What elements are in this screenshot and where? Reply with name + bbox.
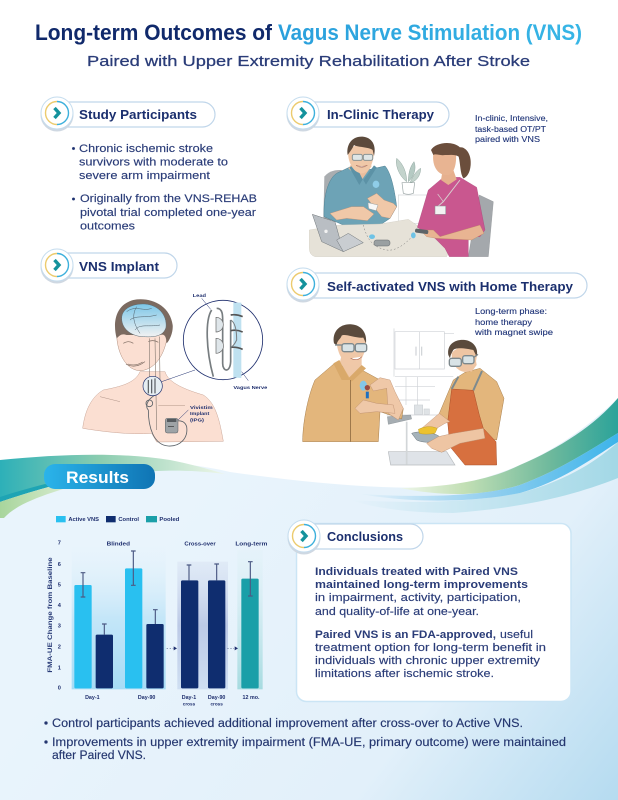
text block: bottom findings: Improvements in upper extremity impairment (FMA-UE, primary outcome) were maintained: [52, 737, 566, 749]
text block: conclusions: [315, 566, 546, 680]
text block: conclusions: treatment option for long-term benefit in: [315, 642, 546, 654]
badge: results: [44, 464, 155, 489]
caption: home therapy: with magnet swipe: [474, 327, 553, 337]
card: [296, 524, 571, 702]
y axis values: 5: [58, 583, 61, 589]
panel: self-activated VNS: [286, 268, 587, 465]
text block: bottom findings: Control participants achieved additional improvement after cross-over to Active VNS.: [52, 718, 523, 730]
heading: conclusions: [288, 520, 423, 554]
legend: Active VNS: [68, 517, 99, 523]
section titles: Long-term: [235, 541, 268, 547]
heading: study participants: Study Participants: [79, 107, 197, 122]
x labels: [85, 695, 260, 707]
y axis values: 0: [58, 686, 61, 692]
lead wire: [147, 395, 187, 446]
panel: in-clinic therapy: [286, 97, 548, 257]
patient washing dishes: [412, 340, 504, 465]
caption: in-clinic: In-clinic, Intensive,: [475, 113, 548, 123]
x labels: cross: [183, 702, 196, 707]
panel: conclusions: [288, 520, 571, 702]
y axis values: 2: [58, 645, 61, 651]
y axis values: 4: [58, 603, 62, 609]
y axis label: FMA-UE Change from Baseline: [47, 557, 54, 673]
subtitle: Paired with Upper Extremity Rehabilitation After Stroke: [87, 53, 530, 70]
text block: participants bullets: pivotal trial completed one-year: [80, 207, 256, 219]
label leaders: [177, 298, 248, 421]
patient: [324, 137, 397, 225]
plant and shelf: [396, 158, 427, 223]
panel: study participants: [40, 97, 257, 232]
error bars: [81, 551, 253, 635]
y axis values: [58, 540, 62, 692]
clinician: [415, 143, 485, 257]
face details: [123, 341, 158, 366]
labels: Vivistim: [190, 405, 213, 410]
title: [35, 20, 582, 45]
sink: [387, 415, 455, 465]
heading: conclusions: Conclusions: [327, 529, 403, 544]
legend: Control: [118, 517, 139, 523]
text block: participants bullets: Chronic ischemic stroke: [79, 143, 213, 155]
kitchen background: [387, 328, 454, 415]
heading: in-clinic therapy: In-Clinic Therapy: [327, 107, 435, 122]
labels: Lead: [193, 293, 206, 298]
x labels: Day-1: [182, 695, 196, 701]
caption: home therapy: home therapy: [475, 317, 533, 327]
bar chart: FMA-UE change from baseline: [47, 516, 268, 707]
arrows: [167, 646, 238, 650]
section titles: [107, 541, 268, 547]
device on table: [363, 225, 416, 250]
x labels: Day-90: [208, 695, 225, 701]
head: [117, 320, 170, 371]
labels: Implant: [190, 411, 210, 416]
callout connector: [162, 370, 195, 382]
caption: in-clinic: [475, 113, 548, 144]
illustration: home therapy: [303, 324, 504, 465]
panel: VNS implant: [40, 249, 268, 446]
y axis values: 3: [58, 624, 61, 630]
heading: VNS implant: [40, 249, 177, 284]
small callout circle: [143, 376, 162, 396]
chart sections: [72, 547, 166, 689]
labels: (IPG): [190, 418, 205, 423]
background wave: [0, 398, 618, 800]
illustration: clinician and patient at table: [309, 137, 493, 257]
text block: conclusions: limitations after ischemic stroke.: [315, 668, 494, 680]
x labels: Day-1: [85, 695, 100, 701]
magnified circle: [183, 300, 263, 380]
legend: [56, 516, 180, 523]
text block: conclusions: individuals with chronic upper extremity: [315, 655, 540, 667]
caption: home therapy: Long-term phase:: [475, 306, 547, 316]
text block: conclusions: Paired VNS is an FDA-approved,: [315, 629, 496, 641]
caption: in-clinic: paired with VNS: [475, 134, 540, 144]
illustration: implant in patient: [83, 293, 268, 446]
text block: bottom findings: [44, 718, 566, 762]
heading: VNS implant: VNS Implant: [79, 259, 160, 274]
heading: self-activated: Self-activated VNS with Home Therapy: [327, 279, 574, 294]
section titles: Cross-over: [184, 541, 216, 547]
laptop: [312, 214, 363, 252]
title: Vagus Nerve Stimulation (VNS): [278, 20, 582, 45]
y axis values: 6: [58, 562, 61, 568]
text block: conclusions: Individuals treated with Paired VNS: [315, 566, 518, 578]
y axis values: 1: [58, 665, 61, 671]
caption: in-clinic: task-based OT/PT: [475, 124, 546, 134]
x labels: Day-90: [138, 695, 155, 701]
legend: Pooled: [159, 517, 180, 523]
text block: participants bullets: survivors with moderate to: [79, 156, 228, 168]
text block: participants bullets: Originally from the VNS-REHAB: [80, 193, 257, 205]
text block: bottom findings: after Paired VNS.: [52, 750, 146, 762]
text block: conclusions: maintained long-term improvements: [315, 579, 528, 591]
implanted generator: [165, 418, 178, 433]
text block: conclusions: useful: [500, 629, 533, 641]
patient with magnet: [303, 324, 403, 442]
title: Long-term Outcomes of: [35, 20, 273, 45]
brain: [122, 304, 166, 337]
patient chair: [323, 170, 342, 220]
section titles: Blinded: [107, 541, 130, 547]
heading: self-activated: [286, 268, 587, 302]
labels: Vagus Nerve: [233, 385, 268, 390]
text block: participants bullets: outcomes: [80, 220, 136, 232]
x labels: 12 mo.: [243, 695, 260, 701]
bars: [74, 568, 259, 688]
badge: results: Results: [66, 468, 129, 487]
y axis values: 7: [58, 540, 61, 546]
caption: home therapy: [474, 306, 553, 337]
text block: conclusions: in impairment, activity, participation,: [315, 592, 521, 604]
table: [309, 219, 450, 257]
text block: conclusions: and quality-of-life at one-year.: [315, 606, 479, 618]
heading: study participants: [40, 97, 215, 132]
text block: participants bullets: [72, 143, 257, 232]
x labels: cross: [210, 702, 223, 707]
heading: in-clinic therapy: [286, 97, 449, 132]
text block: participants bullets: severe arm impairment: [79, 170, 210, 182]
torso: [83, 372, 223, 442]
clinician chair: [468, 195, 493, 257]
labels: [190, 293, 268, 423]
